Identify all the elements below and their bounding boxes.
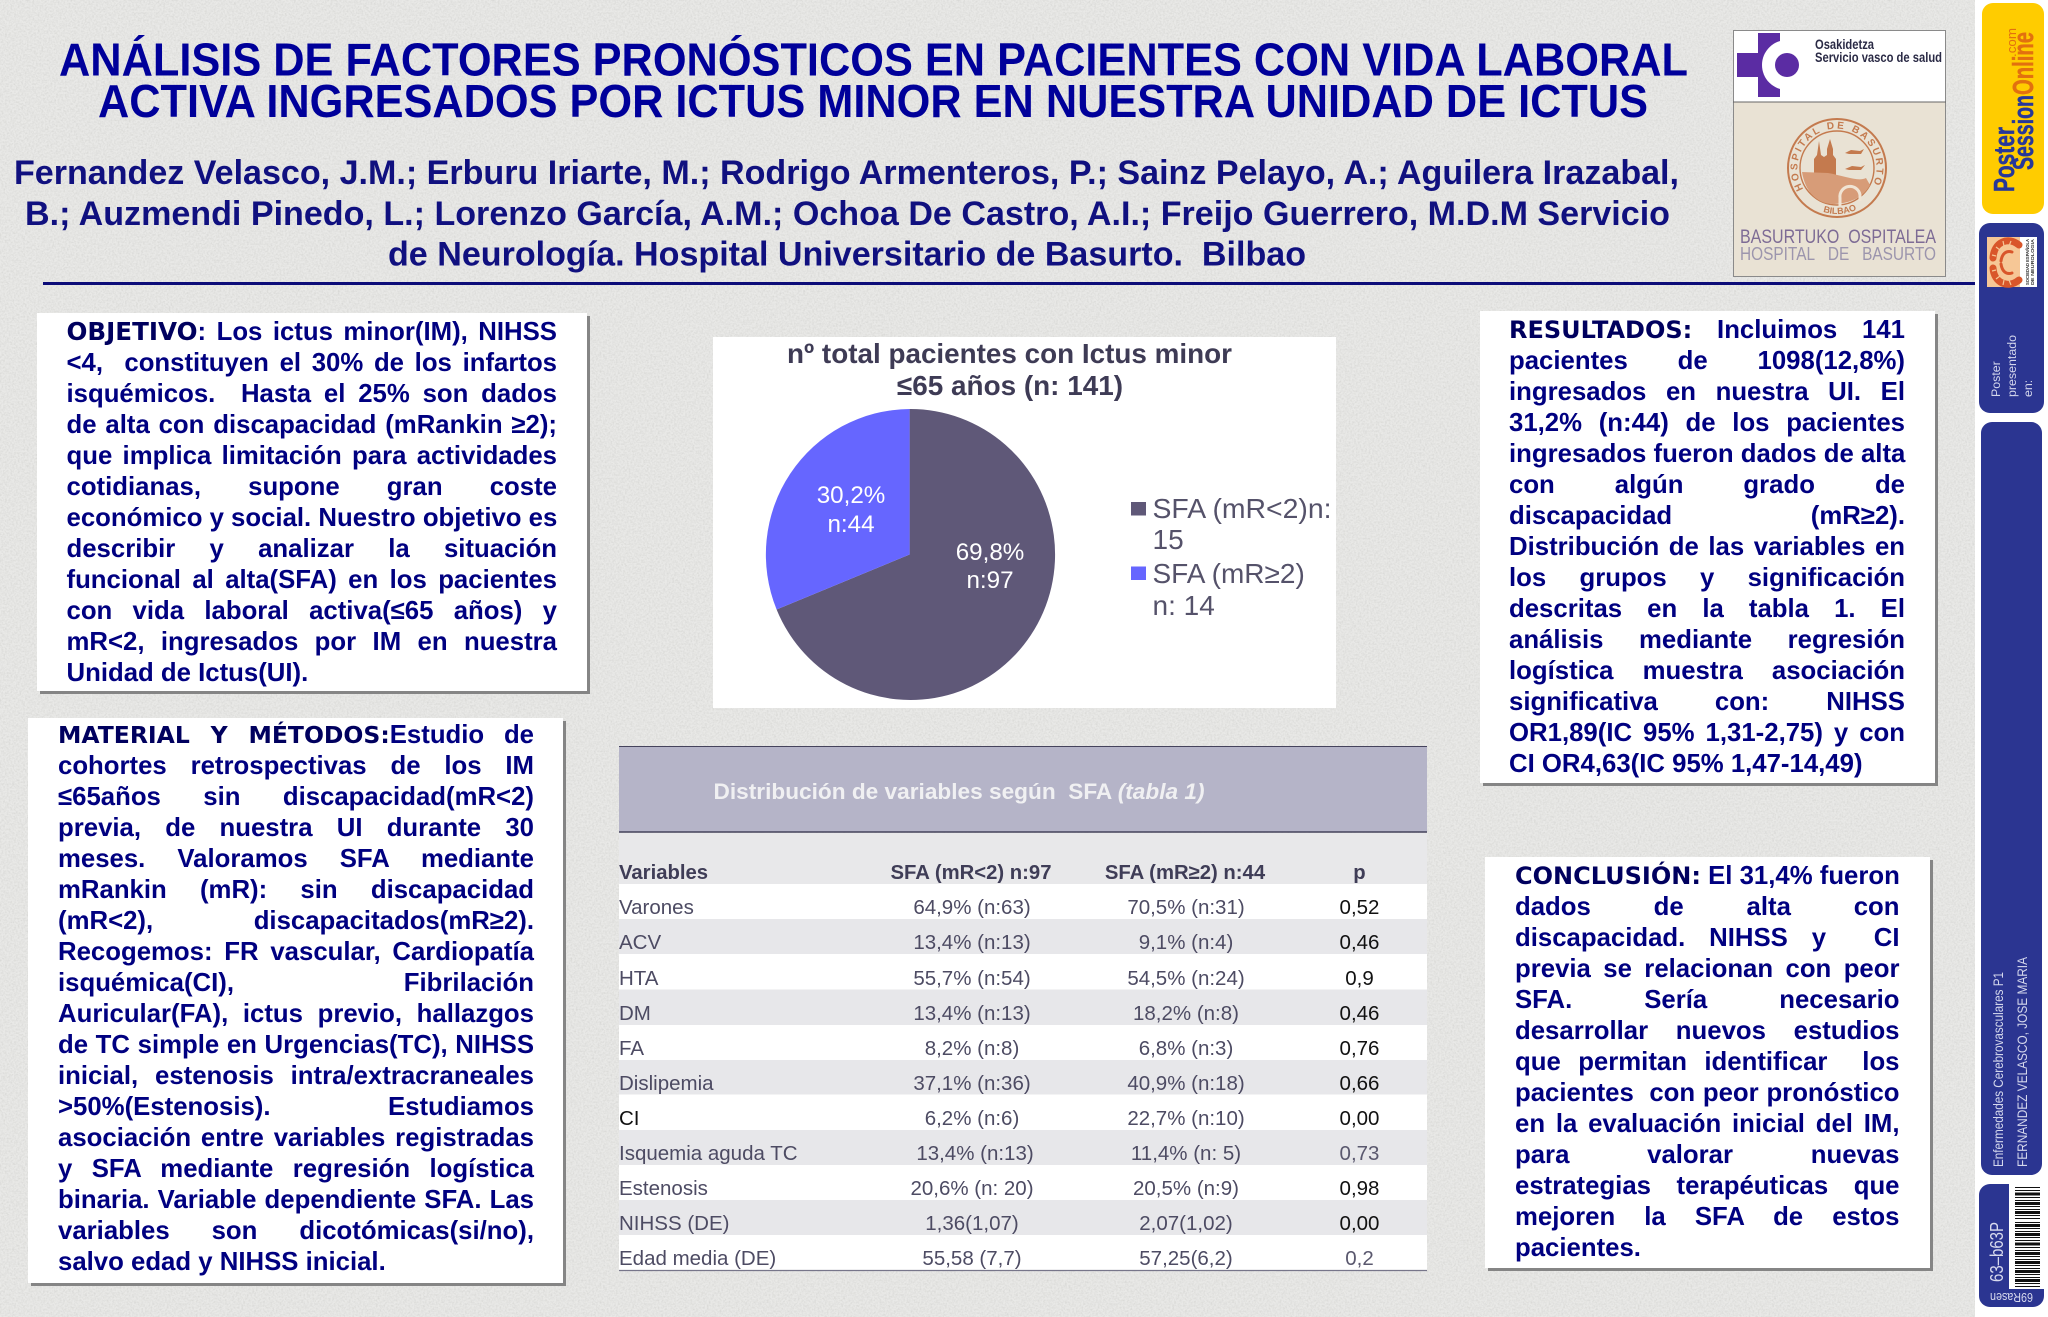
table rows: 0,00 — [1340, 1212, 1379, 1235]
conclusion text: pacientes. — [1515, 1234, 1641, 1262]
table rows: 0,46 — [1340, 931, 1379, 954]
objetivo text: describir y analizar la situación — [66, 535, 557, 563]
resultados text: RESULTADOS: Incluimos 141 — [1509, 316, 1905, 344]
material y metodos text: binaria. Variable dependiente SFA. Las — [58, 1186, 534, 1214]
authors and affiliation: Fernandez Velasco, J.M.; Erburu Iriarte, M.; Rodrigo Armenteros, P.; Sainz Pelayo, A.; Aguilera Irazabal, — [14, 154, 1679, 192]
pie labels: 30,2% — [817, 482, 885, 509]
material y metodos text: mRankin (mR): sin discapacidad — [58, 876, 534, 904]
conclusion text: pacientes con peor pronóstico — [1515, 1078, 1900, 1106]
table rows: FA — [619, 1037, 644, 1060]
material y metodos text: variables son dicotómicas(si/no), — [58, 1217, 534, 1245]
panel: material y metodos — [28, 718, 563, 1283]
conclusion text: desarrollar nuevos estudios — [1515, 1016, 1900, 1044]
table rows: 18,2% (n:8) — [1133, 1002, 1239, 1025]
objetivo text: Unidad de Ictus(UI). — [66, 659, 308, 687]
material y metodos text: >50%(Estenosis). Estudiamos — [58, 1093, 534, 1121]
material y metodos text — [58, 721, 534, 1276]
table rows: 55,58 (7,7) — [922, 1247, 1022, 1270]
sidebar: PosterSessionOnline badge: .com — [2004, 28, 2019, 57]
table column headers — [619, 862, 1366, 884]
conclusion text: estrategias terapéuticas que — [1515, 1172, 1900, 1200]
table rows: Dislipemia — [619, 1072, 714, 1095]
sidebar: poster presented at — [1979, 223, 2044, 413]
conclusion text: SFA. Sería necesario — [1515, 986, 1900, 1014]
objetivo text: que implica limitación para actividades — [66, 442, 557, 470]
table rows: 2,07(1,02) — [1139, 1212, 1233, 1235]
chart title: ≤65 años (n: 141) — [897, 370, 1123, 401]
material y metodos text: asociación entre variables registradas — [58, 1124, 534, 1152]
material y metodos text: Recogemos: FR vascular, Cardiopatía — [58, 938, 534, 966]
resultados text: Distribución de las variables en — [1509, 533, 1905, 561]
conclusion text: para valorar nuevas — [1515, 1140, 1900, 1168]
objetivo text: económico y social. Nuestro objetivo es — [66, 504, 557, 532]
resultados text: con algún grado de — [1509, 471, 1905, 499]
panel: conclusion — [1485, 857, 1930, 1268]
objetivo text: <4, constituyen el 30% de los infartos — [66, 349, 557, 377]
table rows: Estenosis — [619, 1177, 708, 1200]
authors and affiliation: B.; Auzmendi Pinedo, L.; Lorenzo García, A.M.; Ochoa De Castro, A.I.; Freijo Guerrero, M.D.M Servicio — [25, 195, 1670, 233]
table rows: 40,9% (n:18) — [1127, 1072, 1245, 1095]
table rows: 20,5% (n:9) — [1133, 1177, 1239, 1200]
material y metodos text: MATERIAL Y MÉTODOS:Estudio de — [58, 721, 534, 749]
table rows: 0,52 — [1340, 896, 1379, 919]
icon: neurology society logo: SOCIEDAD ESPAÑOLA — [2024, 238, 2030, 285]
objetivo text: con vida laboral activa(≤65 años) y — [66, 597, 557, 625]
resultados text: los grupos y significación — [1509, 564, 1905, 592]
table rows: 6,2% (n:6) — [925, 1107, 1019, 1130]
resultados text: ingresados fueron dados de alta — [1509, 440, 1905, 468]
icon: hospital seal: BILBAO — [1824, 204, 1856, 214]
table column headers: Variables — [619, 862, 708, 884]
sidebar: PosterSessionOnline badge — [1982, 3, 2044, 214]
material y metodos text: inicial, estenosis intra/extracraneales — [58, 1062, 534, 1090]
table rows: 0,00 — [1340, 1107, 1379, 1130]
material y metodos text: y SFA mediante regresión logística — [58, 1155, 534, 1183]
objetivo text: de alta con discapacidad (mRankin ≥2); — [66, 411, 557, 439]
objetivo text: funcional al alta(SFA) en los pacientes — [66, 566, 557, 594]
Osakidetza label — [1815, 37, 1942, 65]
objetivo text: mR<2, ingresados por IM en nuestra — [66, 628, 557, 656]
table rows: 6,8% (n:3) — [1139, 1037, 1233, 1060]
table rows: 0,66 — [1340, 1072, 1379, 1095]
title — [59, 35, 1688, 127]
icon: neurology society logo — [1987, 237, 2037, 287]
pie labels: 69,8% — [956, 539, 1024, 566]
table rows: HTA — [619, 967, 659, 990]
conclusion text — [1515, 862, 1900, 1262]
sidebar: poster code and barcode: 63–b63P — [1986, 1222, 2007, 1282]
chart title — [787, 338, 1232, 401]
table rows: 22,7% (n:10) — [1127, 1107, 1245, 1130]
conclusion text: previa se relacionan con peor — [1515, 954, 1900, 982]
table rows: 13,4% (n:13) — [913, 931, 1031, 954]
table rows: 37,1% (n:36) — [913, 1072, 1031, 1095]
presented label: Poster — [1989, 361, 2003, 397]
sidebar: poster code and barcode: 69Rasen — [1990, 1290, 2033, 1304]
pie labels: n:44 — [827, 511, 875, 538]
conclusion text: que permitan identificar los — [1515, 1048, 1900, 1076]
objetivo text: OBJETIVO: Los ictus minor(IM), NIHSS — [66, 317, 557, 346]
resultados text: ingresados en nuestra UI. El — [1509, 378, 1905, 406]
sidebar: PosterSessionOnline badge: Poster — [1989, 127, 2021, 192]
table heading: Distribución de variables según SFA (tabla 1) — [714, 779, 1204, 804]
objetivo text: cotidianas, supone gran coste — [66, 473, 557, 501]
table rows: DM — [619, 1002, 651, 1025]
hospital logos — [1733, 30, 1946, 277]
resultados text — [1509, 316, 1906, 778]
pie: mR>=2 slice — [766, 409, 910, 610]
material y metodos text: (mR<2), discapacitados(mR≥2). — [58, 907, 534, 935]
pie: mR<2 slice — [777, 409, 1055, 700]
pie labels — [817, 482, 1024, 594]
Osakidetza label: Osakidetza — [1815, 37, 1874, 52]
conclusion text: mejoren la SFA de estos — [1515, 1202, 1900, 1230]
resultados text: pacientes de 1098(12,8%) — [1509, 347, 1905, 375]
material y metodos text: ≤65años sin discapacidad(mR<2) — [58, 783, 534, 811]
legend: 15 — [1152, 524, 1184, 555]
table rows: 0,98 — [1340, 1177, 1379, 1200]
table rows: Isquemia aguda TC — [619, 1142, 798, 1165]
sidebar: session and author: FERNANDEZ VELASCO, JOSE MARIA — [2015, 957, 2030, 1167]
table column headers: SFA (mR≥2) n:44 — [1105, 862, 1266, 884]
table rows: 0,2 — [1345, 1247, 1374, 1270]
table rows: 54,5% (n:24) — [1127, 967, 1245, 990]
presented label: presentado — [2005, 335, 2019, 397]
sidebar: session and author — [1981, 422, 2042, 1175]
material y metodos text: cohortes retrospectivas de los IM — [58, 752, 534, 780]
table rows: Varones — [619, 896, 694, 919]
panel: pie chart — [713, 337, 1336, 708]
resultados text: 31,2% (n:44) de los pacientes — [1509, 409, 1905, 437]
sidebar: session and author: Enfermedades Cerebrovasculares P1 — [1991, 972, 2006, 1167]
table rows: 0,73 — [1340, 1142, 1379, 1165]
table rows: 0,46 — [1340, 1002, 1379, 1025]
table heading — [619, 746, 1427, 832]
sidebar: poster code and barcode — [1979, 1184, 2044, 1307]
resultados text: OR1,89(IC 95% 1,31-2,75) y con — [1509, 719, 1905, 747]
authors and affiliation — [14, 154, 1679, 274]
table rows: 0,76 — [1340, 1037, 1379, 1060]
objetivo text — [66, 317, 558, 687]
legend: SFA (mR≥2) — [1152, 558, 1305, 589]
table rows: ACV — [619, 931, 661, 954]
resultados text: análisis mediante regresión — [1509, 626, 1905, 654]
table rows: Edad media (DE) — [619, 1247, 776, 1270]
legend — [1131, 493, 1332, 621]
icon: hospital seal: HOSPITAL DE BASURTO — [1790, 122, 1884, 192]
table rows: 70,5% (n:31) — [1127, 896, 1245, 919]
material y metodos text: meses. Valoramos SFA mediante — [58, 845, 534, 873]
icon: hospital seal — [1787, 118, 1887, 218]
table column headers: p — [1353, 862, 1366, 884]
icon: neurology society logo: DE NEUROLOGIA — [2030, 238, 2035, 285]
resultados text: logística muestra asociación — [1509, 657, 1905, 685]
authors and affiliation: de Neurología. Hospital Universitario de Basurto. Bilbao — [388, 236, 1306, 274]
table rows: 13,4% (n:13) — [913, 1002, 1031, 1025]
table rows: 64,9% (n:63) — [913, 896, 1031, 919]
table rows: NIHSS (DE) — [619, 1212, 729, 1235]
resultados text: descritas en la tabla 1. El — [1509, 595, 1905, 623]
conclusion text: discapacidad. NIHSS y CI — [1515, 924, 1900, 952]
presented label — [1989, 335, 2035, 397]
conclusion text: en la evaluación inicial del IM, — [1515, 1110, 1900, 1138]
table rows: 55,7% (n:54) — [913, 967, 1031, 990]
material y metodos text: salvo edad y NIHSS inicial. — [58, 1248, 386, 1276]
table rows: 9,1% (n:4) — [1139, 931, 1233, 954]
material y metodos text: previa, de nuestra UI durante 30 — [58, 814, 534, 842]
resultados text: CI OR4,63(IC 95% 1,47-14,49) — [1509, 750, 1863, 778]
table rows: 13,4% (n:13) — [916, 1142, 1034, 1165]
presented label: en: — [2021, 380, 2035, 397]
table column headers: SFA (mR<2) n:97 — [891, 862, 1051, 884]
panel: objetivo — [37, 313, 587, 691]
icon: Osakidetza cross — [1737, 33, 1812, 97]
resultados text: significativa con: NIHSS — [1509, 688, 1905, 716]
material y metodos text: Auricular(FA), ictus previo, hallazgos — [58, 1000, 534, 1028]
table rows — [619, 896, 1379, 1270]
material y metodos text: isquémica(CI), Fibrilación — [58, 969, 534, 997]
table rows: 57,25(6,2) — [1139, 1247, 1233, 1270]
sidebar: PosterSessionOnline badge: Session — [2008, 95, 2040, 170]
table rows: 20,6% (n: 20) — [910, 1177, 1034, 1200]
objetivo text: isquémicos. Hasta el 25% son dados — [66, 380, 557, 408]
panel: resultados — [1480, 311, 1935, 783]
table rows: CI — [619, 1107, 640, 1130]
material y metodos text: de TC simple en Urgencias(TC), NIHSS — [58, 1031, 534, 1059]
table: variables by SFA — [619, 746, 1427, 1272]
legend: SFA (mR<2)n: — [1152, 493, 1332, 524]
conclusion text: CONCLUSIÓN: El 31,4% fueron — [1515, 862, 1900, 890]
legend: n: 14 — [1152, 590, 1215, 621]
barcode — [2015, 1188, 2040, 1286]
table rows: 11,4% (n: 5) — [1131, 1142, 1241, 1165]
hospital name — [1740, 227, 1936, 264]
sidebar: PosterSessionOnline badge: Online — [2008, 32, 2040, 95]
table rows: 8,2% (n:8) — [925, 1037, 1019, 1060]
table rows: 1,36(1,07) — [925, 1212, 1019, 1235]
title: ACTIVA INGRESADOS POR ICTUS MINOR EN NUESTRA UNIDAD DE ICTUS — [98, 75, 1648, 127]
pie labels: n:97 — [966, 567, 1014, 594]
chart title: nº total pacientes con Ictus minor — [787, 338, 1232, 369]
resultados text: discapacidad (mR≥2). — [1509, 502, 1905, 530]
table rows: 0,9 — [1345, 967, 1374, 990]
conclusion text: dados de alta con — [1515, 892, 1900, 920]
